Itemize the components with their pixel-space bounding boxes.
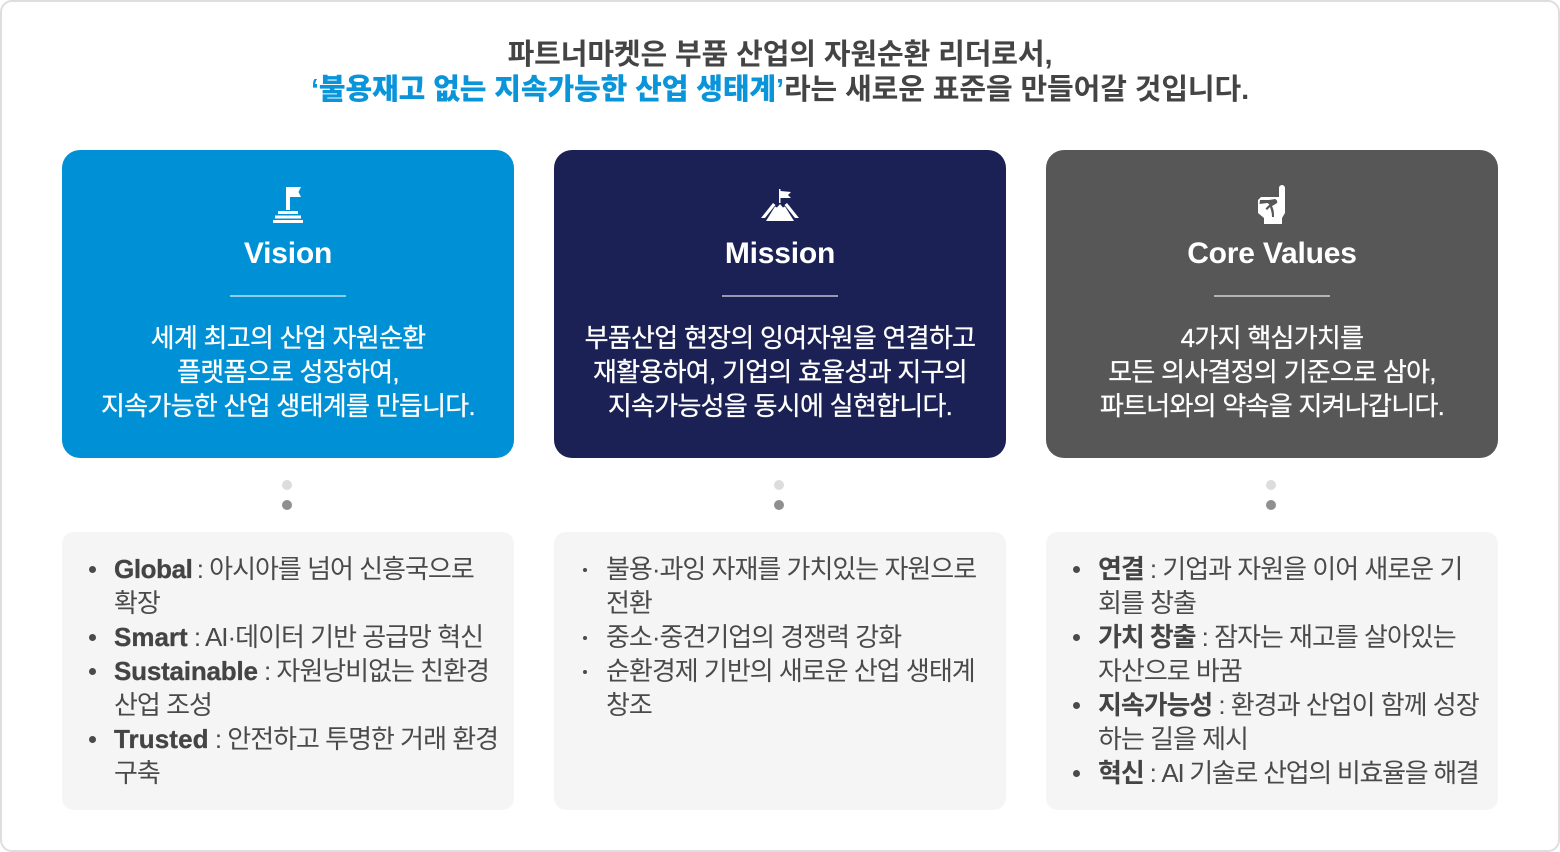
connector dots: vision [282, 480, 292, 510]
text: core values statement: 파트너와의 약속을 지켜나갑니다. [1100, 391, 1444, 421]
text: vision statement [101, 323, 475, 421]
panel: vision details: Sustainable : 자원낭비없는 친환경 [114, 656, 489, 686]
panel: mission details: 창조 [606, 690, 652, 720]
connector dots: mission [774, 480, 784, 510]
panel: vision details [62, 532, 514, 810]
text: mission statement: 지속가능성을 동시에 실현합니다. [608, 391, 952, 421]
text: core values statement: 모든 의사결정의 기준으로 삼아, [1108, 357, 1436, 387]
title [311, 39, 1249, 106]
text: vision statement: 플랫폼으로 성장하여, [177, 357, 399, 387]
panel: core values details: 회를 창출 [1098, 588, 1196, 618]
icon: pointing hand [1258, 185, 1285, 224]
heading: vision: Vision [244, 237, 332, 270]
text: mission statement [585, 323, 975, 421]
connector dots: core values [1266, 480, 1276, 510]
text: mission statement: 재활용하여, 기업의 효율성과 지구의 [593, 357, 967, 387]
title: ‘불용재고 없는 지속가능한 산업 생태계’라는 새로운 표준을 만들어갈 것입니다. [311, 74, 1249, 106]
panel: vision card [62, 150, 514, 458]
panel: mission card [554, 150, 1006, 458]
panel: core values details [1046, 532, 1498, 810]
panel: core values details: 지속가능성 : 환경과 산업이 함께 성장 [1098, 690, 1479, 720]
text: core values statement: 4가지 핵심가치를 [1181, 323, 1363, 353]
panel: mission details: 중소·중견기업의 경쟁력 강화 [606, 622, 901, 652]
text: vision statement: 지속가능한 산업 생태계를 만듭니다. [101, 391, 475, 421]
panel: vision details: 산업 조성 [114, 690, 212, 720]
text: mission statement: 부품산업 현장의 잉여자원을 연결하고 [585, 323, 975, 353]
icon: flag on podium [273, 187, 303, 223]
panel: core values card [1046, 150, 1498, 458]
panel: core values details: 자산으로 바꿈 [1098, 656, 1242, 686]
title: 파트너마켓은 부품 산업의 자원순환 리더로서, [508, 39, 1052, 71]
panel: core values details: 하는 길을 제시 [1098, 724, 1248, 754]
icon: mountain with flag [761, 189, 799, 221]
text: vision statement: 세계 최고의 산업 자원순환 [151, 323, 425, 353]
panel: core values details: 혁신 : AI 기술로 산업의 비효율을 해결 [1098, 758, 1479, 788]
heading: core values: Core Values [1187, 237, 1357, 270]
panel: vision details: Global : 아시아를 넘어 신흥국으로 [114, 554, 474, 584]
panel: core values details: 연결 : 기업과 자원을 이어 새로운 기 [1098, 554, 1462, 584]
panel: vision details: Trusted : 안전하고 투명한 거래 환경 [114, 724, 498, 754]
panel: vision details: 확장 [114, 588, 160, 618]
panel: mission details: 순환경제 기반의 새로운 산업 생태계 [606, 656, 975, 686]
panel: mission details: 불용·과잉 자재를 가치있는 자원으로 [606, 554, 976, 584]
panel: core values details: 가치 창출 : 잠자는 재고를 살아있는 [1098, 622, 1456, 652]
panel: mission details [554, 532, 1006, 810]
panel: vision details: Smart : AI·데이터 기반 공급망 혁신 [114, 622, 483, 652]
text: core values statement [1100, 323, 1444, 421]
panel: vision details: 구축 [114, 758, 160, 788]
panel: mission details: 전환 [606, 588, 652, 618]
heading: mission: Mission [725, 237, 835, 270]
